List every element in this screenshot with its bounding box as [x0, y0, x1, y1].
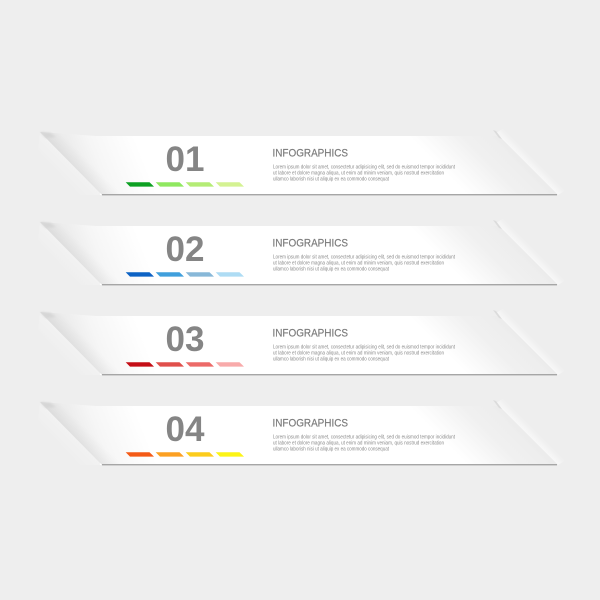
body text: Lorem ipsum dolor sit amet, consectetur adipisicing elit, sed do euismod tempor incididunt: [273, 434, 456, 440]
ribbon shape: [38, 308, 566, 375]
right fold highlight: [493, 310, 502, 319]
heading: INFOGRAPHICS: [272, 238, 348, 250]
number: 03: [166, 320, 204, 359]
left fold highlight: [40, 132, 56, 138]
panel: row 04: [38, 398, 566, 465]
panel: row 01: [38, 128, 566, 195]
heading: INFOGRAPHICS: [272, 148, 348, 160]
right fold highlight: [493, 130, 502, 139]
body text: ullamco laborish nisi ut aliquip ex ea commodo consequat: [273, 176, 390, 182]
left fold highlight: [40, 402, 56, 408]
body text: ut labore et dolore magna aliqua, ut enim ad minim veniam, quis nostrud exercitation: [273, 260, 444, 266]
colour bars: [126, 362, 244, 367]
ribbon shape: [38, 398, 566, 465]
body text: ut labore et dolore magna aliqua, ut enim ad minim veniam, quis nostrud exercitation: [273, 440, 444, 446]
number: 02: [166, 230, 204, 269]
body text: [273, 434, 456, 452]
ribbon shape: [38, 218, 566, 285]
body text: ut labore et dolore magna aliqua, ut enim ad minim veniam, quis nostrud exercitation: [273, 170, 444, 176]
number: 04: [166, 410, 205, 449]
body text: [273, 164, 456, 182]
left fold highlight: [40, 222, 56, 228]
panel: row 02: [38, 218, 566, 285]
body text: Lorem ipsum dolor sit amet, consectetur adipisicing elit, sed do euismod tempor incididunt: [273, 344, 456, 350]
bottom shadow line: [102, 374, 557, 375]
number: 01: [166, 140, 204, 179]
ribbon shape: [38, 128, 566, 195]
colour bars: [126, 272, 244, 277]
right fold highlight: [493, 400, 502, 409]
body text: ullamco laborish nisi ut aliquip ex ea commodo consequat: [273, 446, 390, 452]
bottom shadow line: [102, 194, 557, 195]
body text: [273, 344, 456, 362]
body text: [273, 254, 456, 272]
colour bars: [126, 182, 244, 187]
right fold highlight: [493, 220, 502, 229]
colour bars: [126, 452, 244, 457]
panel: row 03: [38, 308, 566, 375]
body text: Lorem ipsum dolor sit amet, consectetur adipisicing elit, sed do euismod tempor incididunt: [273, 164, 456, 170]
left fold highlight: [40, 312, 56, 318]
bottom shadow line: [102, 464, 557, 465]
heading: INFOGRAPHICS: [272, 328, 348, 340]
body text: ullamco laborish nisi ut aliquip ex ea commodo consequat: [273, 266, 390, 272]
body text: ullamco laborish nisi ut aliquip ex ea commodo consequat: [273, 356, 390, 362]
body text: Lorem ipsum dolor sit amet, consectetur adipisicing elit, sed do euismod tempor incididunt: [273, 254, 456, 260]
body text: ut labore et dolore magna aliqua, ut enim ad minim veniam, quis nostrud exercitation: [273, 350, 444, 356]
bottom shadow line: [102, 284, 557, 285]
heading: INFOGRAPHICS: [272, 418, 348, 430]
